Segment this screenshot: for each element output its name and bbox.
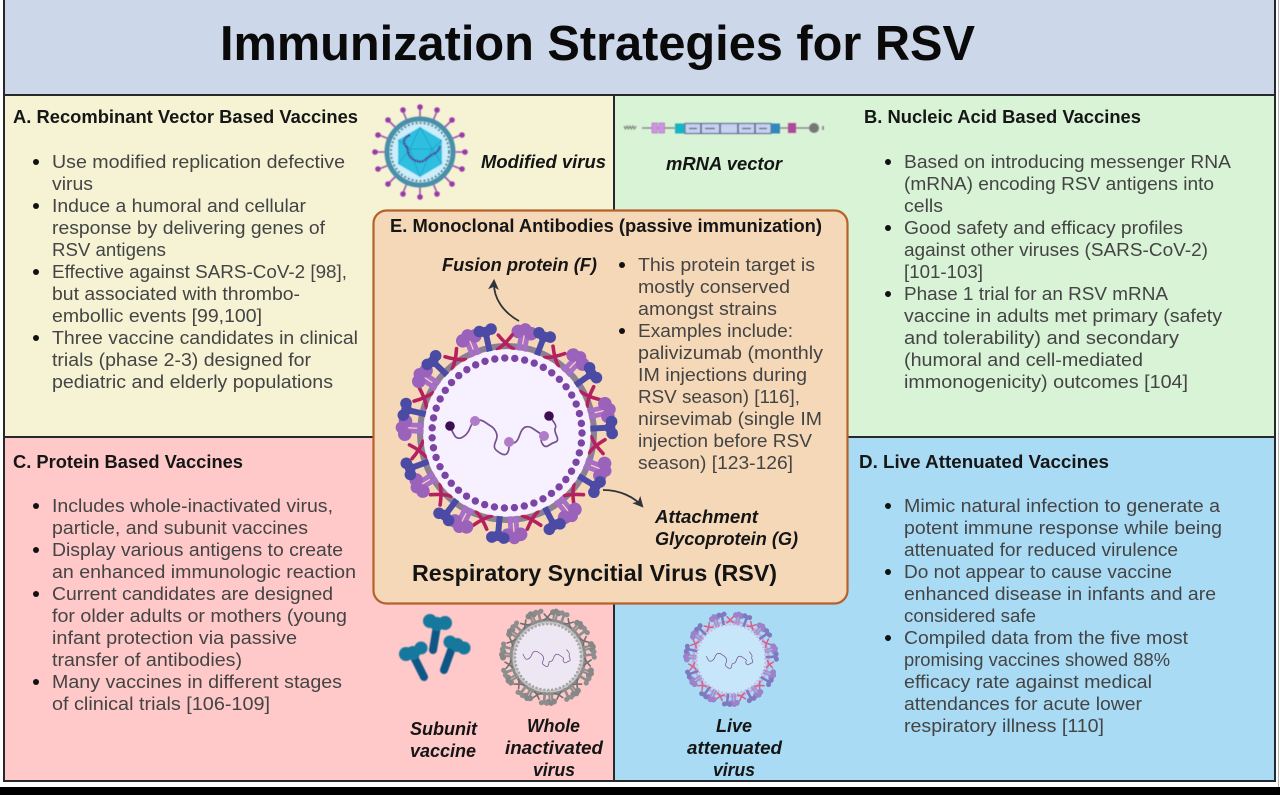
heading B: B. Nucleic Acid Based Vaccines bbox=[864, 107, 1141, 127]
bullet list C: Includes whole-inactivated virus, bbox=[52, 496, 333, 516]
bullet list E: RSV season) [116], bbox=[638, 387, 800, 407]
icon: subunit vaccine bbox=[399, 614, 470, 677]
bullet list E: IM injections during bbox=[638, 365, 807, 385]
bullet list C: an enhanced immunologic reaction bbox=[52, 562, 356, 582]
arrow: to fusion protein bbox=[494, 281, 519, 321]
bullet list B: vaccine in adults met primary (safety bbox=[904, 306, 1222, 326]
bullet list C: for older adults or mothers (young bbox=[52, 606, 347, 626]
bullet list B: (humoral and cell-mediated bbox=[904, 350, 1143, 370]
label: live attenuated virus: attenuated bbox=[687, 738, 783, 758]
bullet list E: palivizumab (monthly bbox=[638, 343, 823, 363]
bullet list D: enhanced disease in infants and are bbox=[904, 584, 1216, 604]
title: Immunization Strategies for RSV bbox=[220, 17, 975, 71]
icon: live attenuated virus bbox=[683, 611, 779, 707]
bullet list B: Based on introducing messenger RNA bbox=[904, 152, 1231, 172]
bullet list E: mostly conserved bbox=[638, 277, 790, 297]
label: subunit vaccine bbox=[410, 719, 478, 761]
bullet list D bbox=[885, 496, 1222, 736]
bullet list E: This protein target is bbox=[638, 255, 815, 275]
heading C: C. Protein Based Vaccines bbox=[13, 452, 243, 472]
label: whole inactivated virus bbox=[505, 716, 604, 780]
icon: mRNA vector bbox=[624, 123, 823, 134]
label: fusion protein: Fusion protein (F) bbox=[442, 255, 597, 275]
bullet list B: immonogenicity) outcomes [104] bbox=[904, 372, 1188, 392]
label: attachment glycoprotein: Glycoprotein (G) bbox=[655, 529, 798, 549]
label: attachment glycoprotein bbox=[654, 507, 798, 549]
bullet list E: amongst strains bbox=[638, 299, 777, 319]
label: live attenuated virus: Live bbox=[716, 716, 752, 736]
bullet list C: transfer of antibodies) bbox=[52, 650, 242, 670]
label: subunit vaccine: Subunit bbox=[410, 719, 478, 739]
label: whole inactivated virus: inactivated bbox=[505, 738, 604, 758]
label: attachment glycoprotein: Attachment bbox=[654, 507, 759, 527]
bullet list E bbox=[619, 255, 823, 473]
bullet list A: Use modified replication defective bbox=[52, 152, 345, 172]
heading A: A. Recombinant Vector Based Vaccines bbox=[13, 107, 358, 127]
bullet list A: but associated with thrombo- bbox=[52, 284, 300, 304]
bullet list D: Mimic natural infection to generate a bbox=[904, 496, 1221, 516]
bullet list D: considered safe bbox=[904, 606, 1036, 626]
bullet list A: Induce a humoral and cellular bbox=[52, 196, 306, 216]
bullet list C bbox=[33, 496, 356, 714]
bullet list A: pediatric and elderly populations bbox=[52, 372, 333, 392]
label: subunit vaccine: vaccine bbox=[410, 741, 476, 761]
bullet list D: Compiled data from the five most bbox=[904, 628, 1188, 648]
arrow: to attachment glycoprotein bbox=[603, 490, 642, 506]
icon: modified virus bbox=[372, 104, 468, 200]
bullet list A: Effective against SARS-CoV-2 [98], bbox=[52, 262, 347, 282]
panel: title banner bbox=[4, 0, 1275, 95]
bullet list D: respiratory illness [110] bbox=[904, 716, 1104, 736]
panel: E monoclonal antibodies bbox=[374, 210, 848, 604]
label: whole inactivated virus: Whole bbox=[527, 716, 580, 736]
bullet list B: against other viruses (SARS-CoV-2) bbox=[904, 240, 1208, 260]
bullet list B: Phase 1 trial for an RSV mRNA bbox=[904, 284, 1168, 304]
label: live attenuated virus: virus bbox=[713, 760, 755, 780]
bullet list C: infant protection via passive bbox=[52, 628, 297, 648]
heading E: E. Monoclonal Antibodies (passive immunization) bbox=[390, 216, 822, 236]
bullet list A: RSV antigens bbox=[52, 240, 166, 260]
bullet list A: embollic events [99,100] bbox=[52, 306, 262, 326]
panel: C protein based vaccines bbox=[5, 437, 614, 781]
caption: virus name: Respiratory Syncitial Virus (RSV) bbox=[412, 560, 777, 586]
bullet list C: Current candidates are designed bbox=[52, 584, 333, 604]
bullet list B: (mRNA) encoding RSV antigens into bbox=[904, 174, 1214, 194]
icon: whole inactivated virus bbox=[499, 608, 597, 706]
bullet list D: attendances for acute lower bbox=[904, 694, 1142, 714]
bullet list B: cells bbox=[904, 196, 943, 216]
bullet list A: response by delivering genes of bbox=[52, 218, 326, 238]
panel: D live attenuated vaccines bbox=[614, 437, 1275, 781]
bullet list E: nirsevimab (single IM bbox=[638, 409, 822, 429]
bullet list C: of clinical trials [106-109] bbox=[52, 694, 270, 714]
bullet list B bbox=[885, 152, 1231, 392]
heading D: D. Live Attenuated Vaccines bbox=[859, 452, 1109, 472]
bullet list D: efficacy rate against medical bbox=[904, 672, 1152, 692]
panel: A recombinant vector based vaccines bbox=[5, 95, 614, 437]
bullet list D: attenuated for reduced virulence bbox=[904, 540, 1178, 560]
bullet list A: trials (phase 2-3) designed for bbox=[52, 350, 311, 370]
bullet list A: Three vaccine candidates in clinical bbox=[52, 328, 358, 348]
label: live attenuated virus bbox=[687, 716, 783, 780]
bullet list C: particle, and subunit vaccines bbox=[52, 518, 308, 538]
bullet list B: Good safety and efficacy profiles bbox=[904, 218, 1183, 238]
bullet list C: Many vaccines in different stages bbox=[52, 672, 342, 692]
bullet list E: injection before RSV bbox=[638, 431, 812, 451]
label: modified virus: Modified virus bbox=[481, 152, 606, 172]
bullet list D: promising vaccines showed 88% bbox=[904, 650, 1170, 670]
bullet list A: virus bbox=[52, 174, 93, 194]
icon: respiratory syncytial virus bbox=[395, 321, 619, 545]
bullet list B: and tolerability) and secondary bbox=[904, 328, 1179, 348]
bullet list A bbox=[33, 152, 358, 392]
bullet list D: potent immune response while being bbox=[904, 518, 1222, 538]
bullet list B: [101-103] bbox=[904, 262, 983, 282]
panel: B nucleic acid based vaccines bbox=[614, 95, 1275, 437]
bullet list E: Examples include: bbox=[638, 321, 793, 341]
label: mRNA vector: mRNA vector bbox=[666, 154, 783, 174]
bullet list D: Do not appear to cause vaccine bbox=[904, 562, 1172, 582]
bullet list C: Display various antigens to create bbox=[52, 540, 343, 560]
bullet list E: season) [123-126] bbox=[638, 453, 793, 473]
label: whole inactivated virus: virus bbox=[533, 760, 575, 780]
